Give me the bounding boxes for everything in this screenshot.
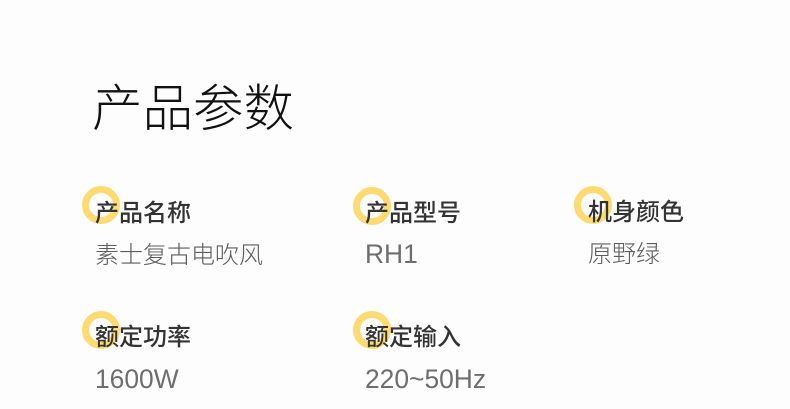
label: 机身颜色	[588, 192, 684, 227]
icon: ring, body colour	[574, 186, 612, 224]
spec: body colour	[588, 192, 684, 269]
icon: ring, rated power	[82, 311, 120, 349]
label: 产品型号	[365, 193, 461, 228]
label: 产品名称	[95, 193, 191, 228]
spec: rated input	[365, 317, 486, 394]
spec: rated power	[95, 317, 191, 394]
label: 额定输入	[365, 317, 461, 352]
icon: ring, product name	[82, 186, 120, 224]
spec: product name	[95, 193, 263, 270]
value: 1600W	[95, 364, 179, 394]
icon: ring, rated input	[353, 311, 391, 349]
spec: product model	[365, 193, 461, 269]
value: 原野绿	[588, 234, 660, 269]
value: 220~50Hz	[365, 364, 486, 394]
value: 素士复古电吹风	[95, 235, 263, 270]
label: 额定功率	[95, 317, 191, 352]
title: 产品参数	[92, 67, 294, 141]
icon: ring, product model	[353, 187, 391, 225]
value: RH1	[365, 239, 418, 269]
